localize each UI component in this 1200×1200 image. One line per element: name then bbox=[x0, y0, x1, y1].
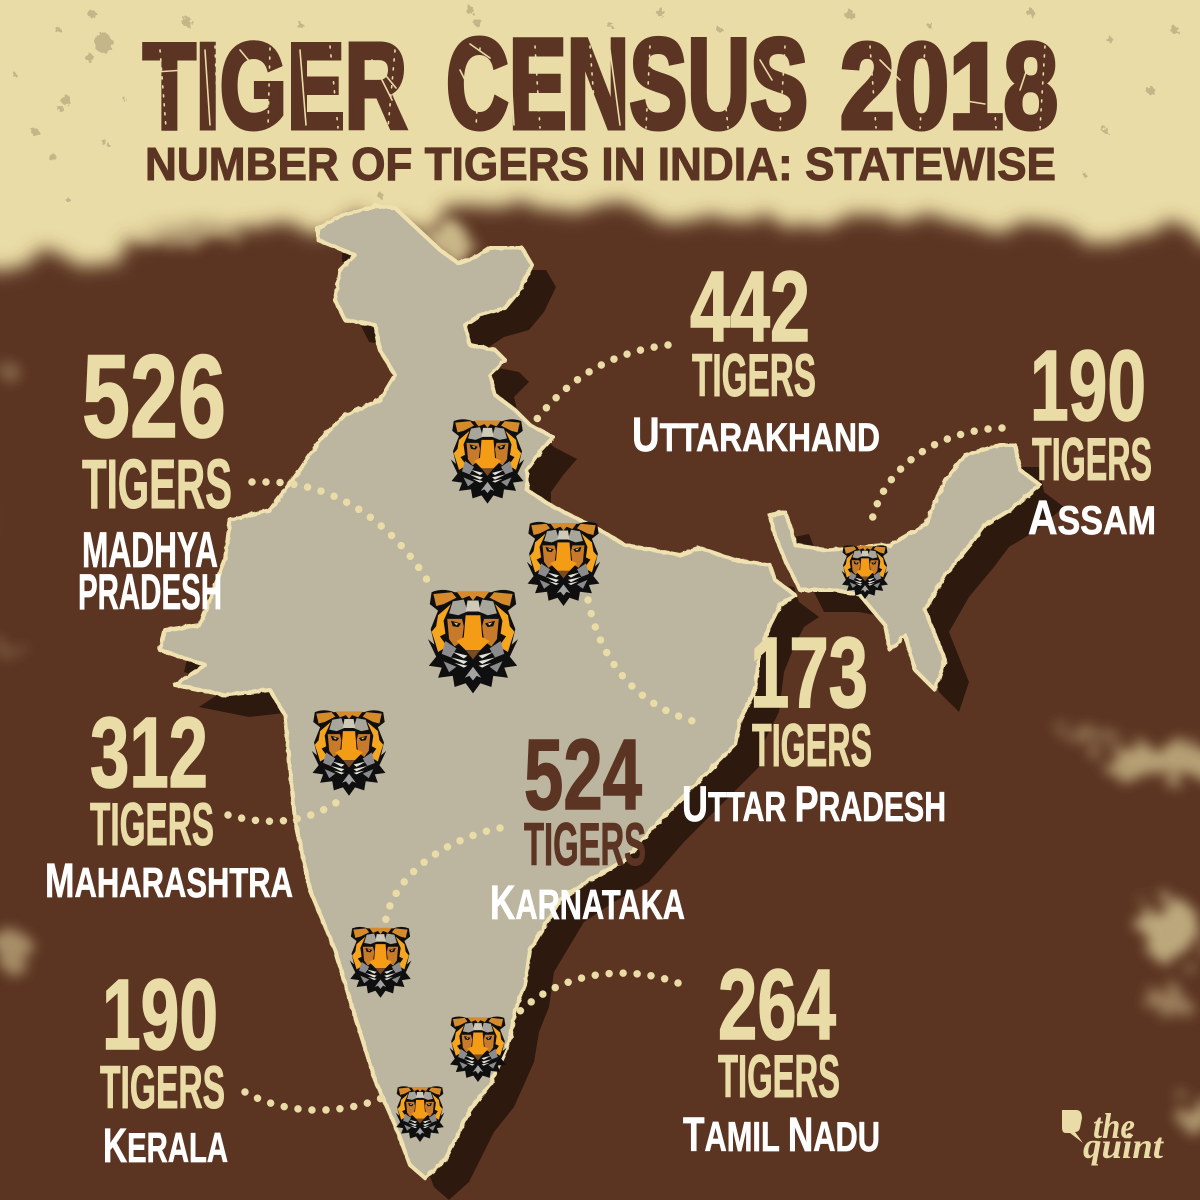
stat: Kerala: KERALA bbox=[103, 1120, 228, 1173]
stat: Madhya Pradesh: 526 bbox=[82, 331, 226, 463]
title: 2018 bbox=[840, 18, 1058, 154]
dotted connector: Uttarakhand bbox=[530, 345, 668, 428]
background: worn light patches bbox=[0, 220, 1200, 1133]
logo: The Quint: quint bbox=[1083, 1126, 1164, 1166]
stat: Karnataka: 524 bbox=[524, 719, 642, 831]
title distress marks bbox=[155, 44, 1045, 128]
stat: Uttar Pradesh: UTTAR PRADESH bbox=[682, 776, 946, 832]
stat: Maharashtra: MAHARASHTRA bbox=[45, 855, 293, 908]
dotted connector: Uttar Pradesh bbox=[588, 600, 696, 722]
stat: Madhya Pradesh: MADHYA bbox=[82, 522, 218, 578]
icon: tiger Madhya Pradesh bbox=[428, 590, 518, 693]
stat: Madhya Pradesh bbox=[78, 331, 232, 620]
title: TIGER bbox=[143, 18, 407, 154]
stat: Madhya Pradesh: TIGERS bbox=[82, 445, 232, 523]
stat: Uttarakhand: 442 bbox=[690, 251, 810, 363]
dotted connector: Maharashtra bbox=[228, 800, 340, 821]
dotted connector: Kerala bbox=[245, 1092, 382, 1110]
stat: Uttar Pradesh: TIGERS bbox=[752, 712, 872, 779]
icon: tiger Maharashtra bbox=[312, 710, 386, 796]
stat: Tamil Nadu: 264 bbox=[718, 949, 836, 1061]
map of India bbox=[160, 206, 1040, 1178]
stat: Maharashtra: 312 bbox=[90, 697, 208, 809]
icon: tiger Karnataka bbox=[350, 927, 411, 998]
dotted connector: Madhya Pradesh bbox=[252, 482, 432, 588]
stat: Maharashtra: TIGERS bbox=[90, 791, 214, 858]
title bbox=[143, 13, 1058, 156]
stat: Assam: 190 bbox=[1030, 330, 1146, 442]
stat: Uttar Pradesh: 173 bbox=[750, 617, 868, 729]
stat: Maharashtra bbox=[45, 697, 293, 908]
dotted connector: Karnataka bbox=[385, 828, 500, 925]
stat: Tamil Nadu bbox=[683, 949, 880, 1162]
stat: Kerala: TIGERS bbox=[100, 1054, 225, 1121]
logo: The Quint bbox=[1062, 1106, 1164, 1166]
stat: Uttar Pradesh bbox=[682, 617, 946, 832]
dotted connector: Tamil Nadu bbox=[515, 973, 678, 1016]
stat: Kerala: 190 bbox=[102, 959, 218, 1071]
stat: Karnataka: TIGERS bbox=[524, 811, 646, 878]
stat: Assam: ASSAM bbox=[1028, 492, 1156, 545]
stat: Uttarakhand: TIGERS bbox=[692, 342, 816, 409]
stat: Uttarakhand bbox=[632, 251, 880, 462]
stat: Tamil Nadu: TIGERS bbox=[718, 1043, 840, 1110]
stat: Assam bbox=[1028, 330, 1156, 545]
parchment speckles bbox=[13, 6, 1179, 202]
icon: tiger Uttar Pradesh bbox=[527, 522, 600, 606]
stat: Kerala bbox=[100, 959, 228, 1173]
title: CENSUS bbox=[446, 13, 808, 156]
stat: Karnataka bbox=[490, 719, 685, 930]
stat: Madhya Pradesh: PRADESH bbox=[78, 564, 222, 620]
stat: Karnataka: KARNATAKA bbox=[490, 877, 685, 930]
subtitle: NUMBER OF TIGERS IN INDIA: STATEWISE bbox=[145, 138, 1056, 190]
icon: tiger Uttarakhand bbox=[451, 419, 524, 504]
icon: tiger Kerala bbox=[396, 1086, 444, 1142]
map shadow bbox=[184, 228, 1064, 1200]
icon: tiger Assam bbox=[842, 545, 888, 599]
stat: Uttarakhand: UTTARAKHAND bbox=[632, 409, 880, 462]
logo: The Quint: the bbox=[1093, 1106, 1135, 1146]
dotted connector: Assam bbox=[872, 428, 1002, 520]
icon: tiger Tamil Nadu bbox=[449, 1016, 507, 1082]
stat: Tamil Nadu: TAMIL NADU bbox=[683, 1109, 880, 1162]
